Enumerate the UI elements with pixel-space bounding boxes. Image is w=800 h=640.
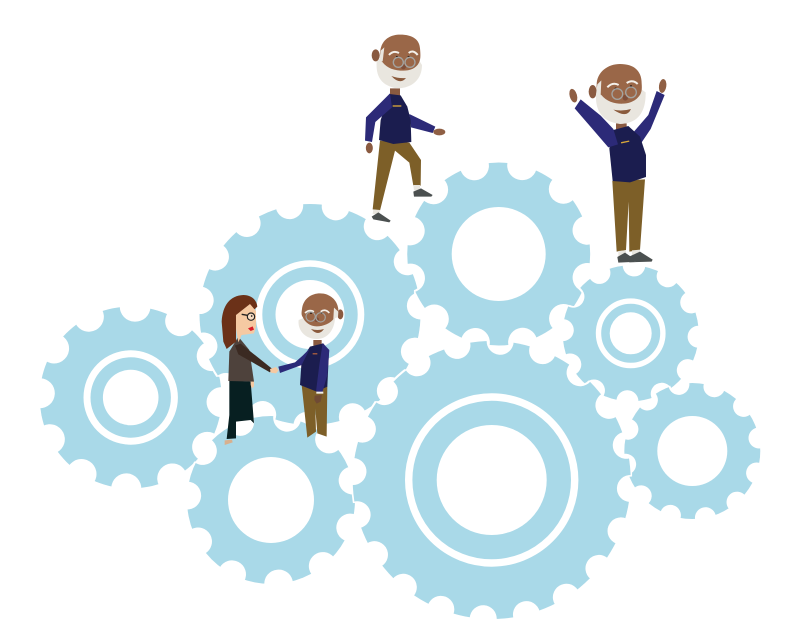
figure: handshake man xyxy=(278,293,343,438)
gear: big centre xyxy=(353,341,631,619)
gear: bottom left xyxy=(187,416,355,584)
gear: upper middle xyxy=(200,204,420,425)
figure: man with raised arms xyxy=(568,64,667,263)
figure: handshake woman xyxy=(222,295,279,445)
gear: upper right large xyxy=(407,162,590,346)
figure: walking man xyxy=(365,35,445,222)
gear: right small with ring xyxy=(563,265,699,401)
gear: left xyxy=(40,306,222,488)
gear: far right xyxy=(624,383,760,519)
